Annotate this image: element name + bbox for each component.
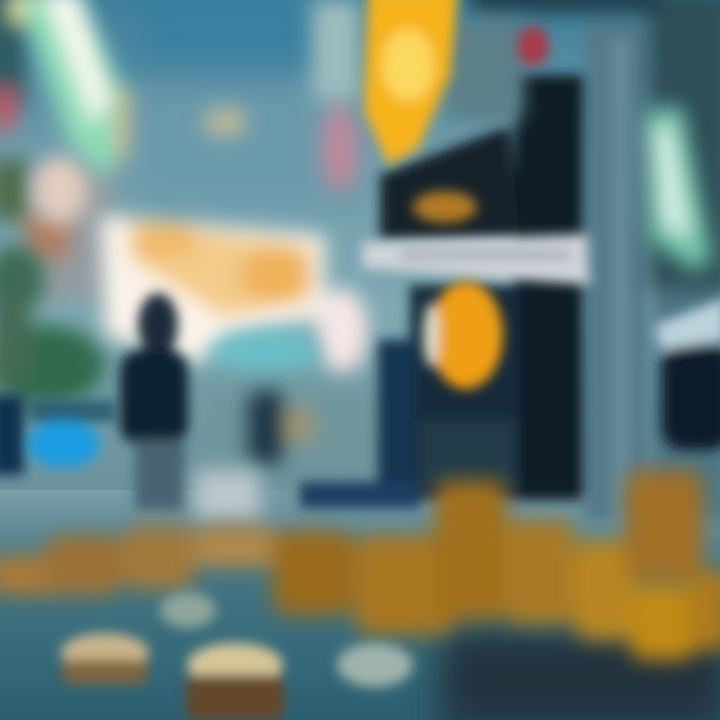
pale street reflection — [195, 470, 260, 520]
white band — [362, 234, 590, 285]
upper center sky building — [135, 0, 360, 200]
blue sign — [0, 395, 115, 475]
top right dark — [470, 0, 720, 520]
upper building above tower — [445, 20, 523, 120]
left buildings — [0, 0, 115, 300]
orange sign on tower — [413, 191, 477, 223]
dark figure right — [248, 390, 314, 465]
background sky — [0, 0, 720, 500]
peach-white awning — [100, 215, 368, 376]
green-white streak — [6, 0, 136, 180]
yellow banner — [364, 0, 458, 165]
pale blurred discs — [61, 592, 413, 720]
right column — [585, 20, 647, 520]
red spot — [517, 26, 549, 66]
floor — [0, 490, 720, 720]
teal glow under awning — [210, 328, 320, 376]
tree — [0, 245, 105, 405]
orange oval — [423, 281, 503, 389]
mid street — [195, 385, 380, 495]
green sign right — [645, 105, 712, 272]
upper center details — [32, 0, 360, 224]
dark figure left — [120, 293, 188, 510]
dark tower — [300, 75, 583, 508]
coin stacks — [0, 470, 720, 660]
right dark object — [655, 298, 720, 450]
